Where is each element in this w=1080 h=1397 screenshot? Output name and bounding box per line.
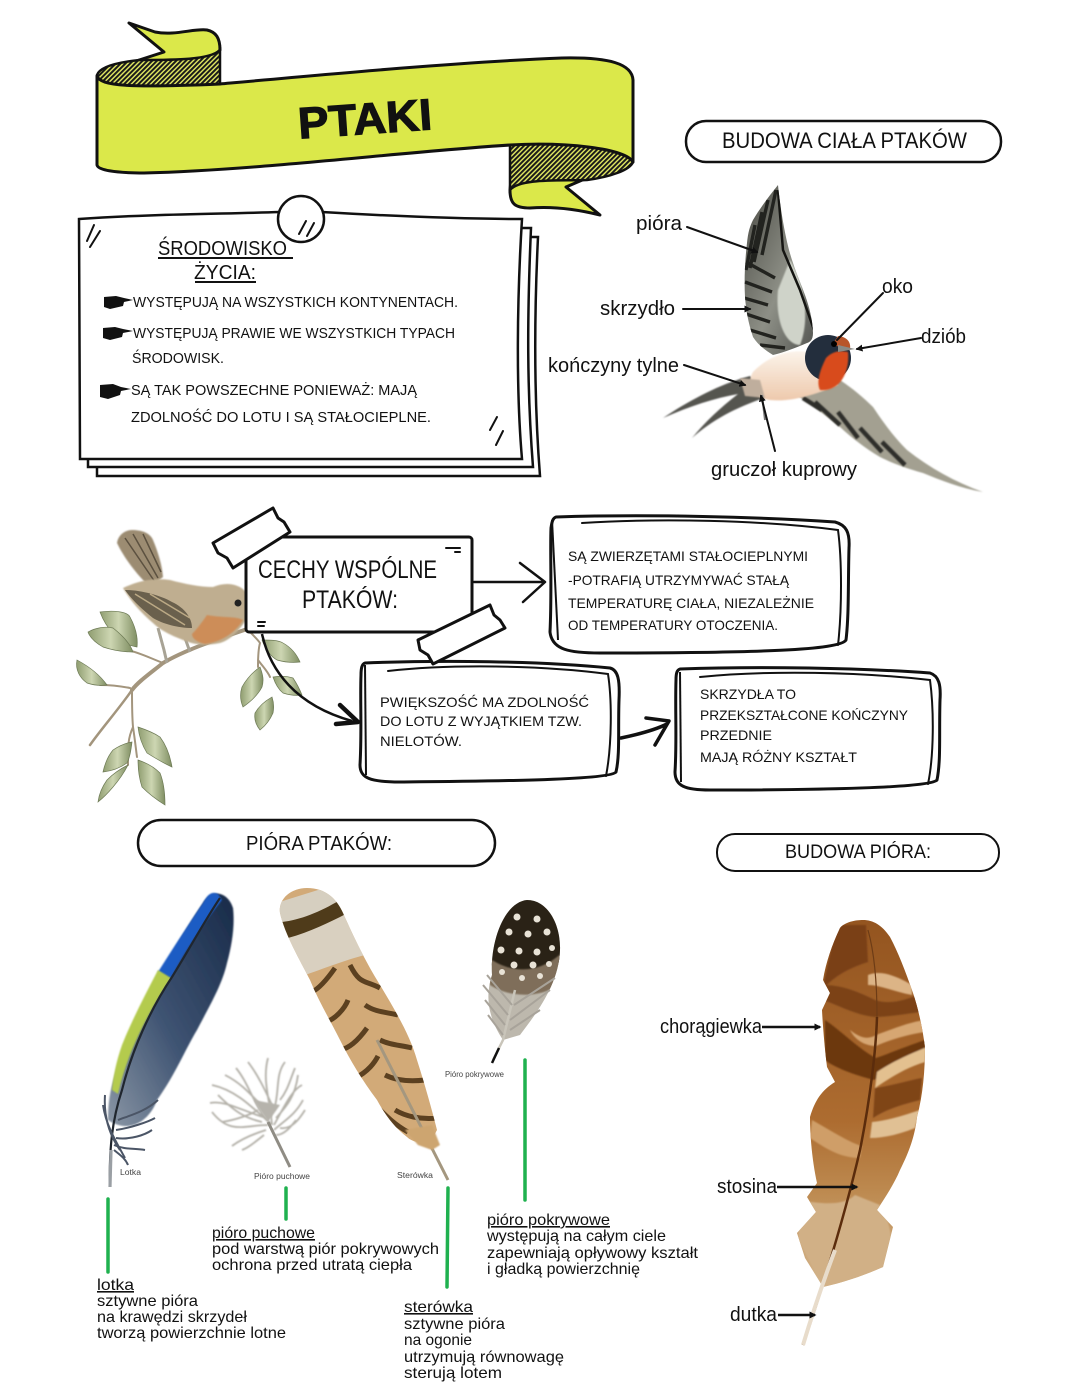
bird breast — [192, 615, 243, 644]
tape on flight box — [418, 605, 505, 664]
wings text: SKRZYDŁA TO — [700, 686, 796, 702]
environment bullet 2: ŚRODOWISK. — [132, 349, 224, 367]
bird tail — [117, 530, 163, 587]
illustration: bird on branch — [77, 530, 302, 805]
arrow: to wings box — [621, 718, 669, 745]
text block: pióro pokrywowe: i gładką powierzchnię — [487, 1261, 640, 1278]
illustration: feather pokrywowe — [445, 895, 565, 1079]
environment bullet 3: ZDOLNOŚĆ DO LOTU I SĄ STAŁOCIEPLNE. — [131, 408, 431, 426]
panel: stałocieplne — [550, 516, 849, 653]
panel: cechy wspólne ptaków — [213, 508, 472, 632]
text block: sterówka: na ogonie — [404, 1332, 472, 1349]
bird wing — [125, 590, 192, 628]
heading text: PTAKÓW: — [302, 585, 398, 614]
caption lotka: Lotka — [120, 1168, 142, 1177]
body — [750, 351, 838, 400]
caption sterówka: Sterówka — [397, 1171, 434, 1180]
text block: sterówka: sterują lotem — [404, 1365, 502, 1382]
banner left tail — [129, 23, 220, 70]
warm-blooded text: TEMPERATURĘ CIAŁA, NIEZALEŻNIE — [568, 594, 814, 611]
illustration: feather puchowe — [210, 1058, 311, 1181]
legs — [158, 628, 190, 663]
text block: sterówka: sztywne pióra — [404, 1316, 505, 1333]
wings text — [700, 686, 909, 765]
arrow: to warm-blooded box — [474, 563, 545, 602]
heading pill: budowa ciała ptaków — [686, 121, 1001, 162]
label: dziób — [857, 326, 966, 349]
heading: środowisko życia: ŚRODOWISKO — [158, 236, 287, 260]
illustration: feather sterówka — [270, 880, 450, 1180]
illustration: feather lotka — [103, 893, 234, 1187]
head — [805, 335, 851, 381]
text block: lotka: tworzą powierzchnie lotne — [97, 1325, 286, 1342]
flight text — [380, 693, 589, 749]
warm-blooded text: -POTRAFIĄ UTRZYMYWAĆ STAŁĄ — [568, 572, 790, 588]
caption pióro pokrywowe: Pióro pokrywowe — [445, 1070, 505, 1079]
text block: pióro puchowe — [212, 1225, 439, 1274]
heading pill: budowa ciała ptaków: BUDOWA CIAŁA PTAKÓW — [722, 128, 967, 153]
label: kończyny tylne — [548, 355, 745, 385]
warm-blooded text: OD TEMPERATURY OTOCZENIA. — [568, 617, 778, 633]
flight text: PWIĘKSZOŚĆ MA ZDOLNOŚĆ — [380, 693, 589, 710]
environment bullet 1: WYSTĘPUJĄ NA WSZYSTKICH KONTYNENTACH. — [133, 294, 458, 311]
text block: lotka: sztywne pióra — [97, 1293, 198, 1310]
text block: pióro puchowe: pod warstwą piór pokrywowych — [212, 1241, 439, 1258]
environment bullet 2 — [132, 325, 455, 367]
text block: pióro pokrywowe: pióro pokrywowe — [487, 1212, 610, 1229]
flight text: DO LOTU Z WYJĄTKIEM TZW. — [380, 713, 582, 729]
heading pill: budowa pióra — [717, 834, 999, 871]
text block: pióro puchowe: pióro puchowe — [212, 1225, 315, 1242]
lower wing — [798, 380, 983, 492]
arrow: to flight box — [262, 634, 358, 724]
heading: środowisko życia: ŻYCIA: — [194, 261, 256, 284]
heading pill: pióra ptaków: PIÓRA PTAKÓW: — [246, 832, 392, 855]
upper wing — [744, 185, 813, 355]
text block: sterówka: sterówka — [404, 1299, 473, 1316]
label: stosina — [717, 1176, 857, 1198]
banner right tail — [510, 170, 600, 215]
text block: sterówka — [404, 1299, 564, 1382]
label: chorągiewka: chorągiewka — [660, 1016, 763, 1038]
label: gruczoł kuprowy — [711, 396, 857, 481]
label: stosina: stosina — [717, 1176, 778, 1198]
icon: pointing hand 2 — [103, 327, 133, 340]
environment bullet 3: SĄ TAK POWSZECHNE PONIEWAŻ: MAJĄ — [131, 381, 418, 399]
red throat — [818, 351, 848, 390]
label: gruczoł kuprowy: gruczoł kuprowy — [711, 459, 857, 481]
illustration: swallow — [663, 180, 983, 492]
label: kończyny tylne: kończyny tylne — [548, 355, 679, 377]
label: dutka: dutka — [730, 1304, 778, 1326]
heading pill: pióra ptaków — [138, 820, 495, 866]
icon: pointing hand 3 — [100, 384, 131, 399]
text block: lotka — [97, 1277, 286, 1342]
caption pióro puchowe: Pióro puchowe — [254, 1172, 311, 1181]
label: dziób: dziób — [921, 326, 966, 348]
wings text: MAJĄ RÓŻNY KSZTAŁT — [700, 748, 857, 765]
label: oko: oko — [882, 276, 913, 298]
heading text: CECHY WSPÓLNE — [258, 555, 437, 584]
banner left fold — [97, 50, 220, 90]
text block: pióro pokrywowe: zapewniają opływowy kształt — [487, 1245, 699, 1262]
tail streamers — [663, 376, 770, 438]
warm-blooded text: SĄ ZWIERZĘTAMI STAŁOCIEPLNYMI — [568, 548, 808, 564]
text block: pióro puchowe: ochrona przed utratą ciepła — [212, 1257, 412, 1274]
label: oko — [837, 276, 913, 340]
label: dutka — [730, 1304, 815, 1326]
banner title text: PTAKI — [296, 90, 434, 149]
panel: zdolność do lotu — [360, 605, 619, 782]
leaves — [77, 611, 302, 805]
text block: pióro pokrywowe — [486, 1212, 699, 1278]
panel: środowisko życia — [79, 196, 540, 476]
title banner — [97, 23, 633, 215]
badge circle — [278, 196, 324, 242]
text block: lotka: na krawędzi skrzydeł — [97, 1309, 247, 1326]
branch — [90, 628, 270, 765]
tape top — [213, 508, 290, 568]
green connector lines — [108, 1060, 525, 1287]
heading text — [258, 555, 437, 614]
icon: pointing hand 1 — [104, 296, 133, 309]
bird body — [123, 579, 251, 645]
warm-blooded text — [568, 548, 814, 633]
environment bullet 2: WYSTĘPUJĄ PRAWIE WE WSZYSTKICH TYPACH — [133, 325, 455, 342]
text block: sterówka: utrzymują równowagę — [404, 1349, 564, 1366]
wings text: PRZEKSZTAŁCONE KOŃCZYNY — [700, 707, 909, 723]
banner main ribbon — [97, 58, 633, 173]
text block: pióro pokrywowe: występują na całym ciele — [486, 1228, 666, 1245]
wings text: PRZEDNIE — [700, 727, 772, 743]
flight text: NIELOTÓW. — [380, 733, 462, 749]
label: pióra: pióra — [636, 213, 683, 235]
illustration: large feather structure — [790, 915, 930, 1345]
panel: skrzydła — [675, 668, 940, 790]
text block: lotka: lotka — [97, 1277, 134, 1294]
heading pill: budowa pióra: BUDOWA PIÓRA: — [785, 841, 931, 863]
banner right fold — [510, 144, 633, 190]
heading: środowisko życia — [158, 236, 293, 284]
label: skrzydło: skrzydło — [600, 298, 675, 320]
label: pióra — [636, 213, 757, 252]
environment bullet 3 — [131, 381, 431, 426]
